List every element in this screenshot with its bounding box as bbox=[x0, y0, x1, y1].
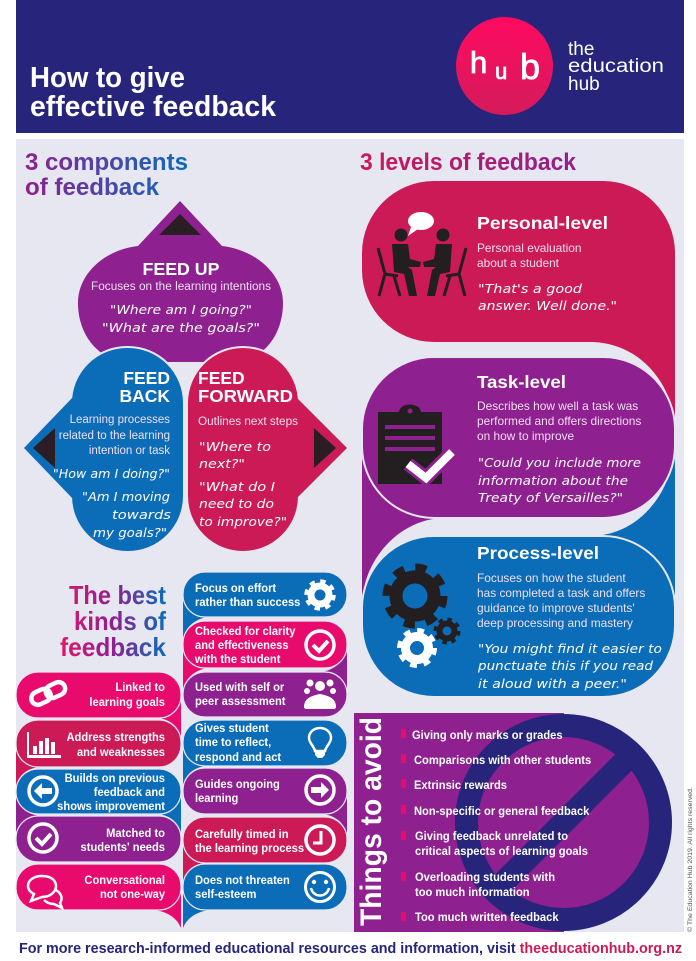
feed back text: my goals?" bbox=[93, 525, 167, 540]
bubble: guides ongoing learning: Guides ongoing bbox=[195, 779, 280, 791]
bubble: carefully timed: the learning process bbox=[195, 843, 304, 855]
process-level text: deep processing and mastery bbox=[477, 616, 633, 630]
task-level text: on how to improve bbox=[477, 429, 575, 443]
feed back text: Learning processes bbox=[70, 414, 170, 426]
feed forward text: FORWARD bbox=[198, 386, 293, 406]
bubble: address strengths and weaknesses: Address strengths bbox=[66, 732, 165, 744]
panel: things to avoid bbox=[354, 713, 660, 932]
heading: the best kinds of feedback: kinds of bbox=[74, 606, 166, 636]
process-level text: it aloud with a peer." bbox=[478, 676, 627, 691]
icon: gear bbox=[306, 582, 334, 608]
bubble: carefully timed: Carefully timed in bbox=[195, 829, 289, 841]
feed back text: intention or task bbox=[89, 445, 170, 457]
heading: the best kinds of feedback: feedback bbox=[60, 632, 166, 662]
bubble: focus on effort: Focus on effort bbox=[195, 583, 276, 595]
task-level text: information about the bbox=[478, 473, 628, 488]
list of things to avoid: Non-specific or general feedback bbox=[414, 806, 590, 818]
bubble: gives student time: Gives student bbox=[195, 723, 269, 735]
heading: the best kinds of feedback: The best bbox=[69, 580, 166, 610]
logo: u bbox=[495, 59, 507, 84]
panel: process-level bbox=[362, 536, 675, 697]
vertical heading: Things to avoid bbox=[355, 717, 388, 926]
icon: forward arrow bbox=[306, 776, 334, 804]
feed back text: FEED bbox=[123, 368, 170, 388]
bubble: does not threaten self-esteem bbox=[183, 864, 347, 910]
process-level text: guidance to improve students' bbox=[477, 601, 635, 615]
panel: personal-level bbox=[362, 181, 675, 342]
bubble: conversational not one-way: not one-way bbox=[100, 889, 166, 901]
icon: clock bbox=[306, 826, 334, 854]
bubble: linked to learning goals bbox=[16, 672, 181, 718]
feed forward text: FEED bbox=[198, 368, 245, 388]
list of things to avoid: Comparisons with other students bbox=[414, 755, 591, 767]
bubble: focus on effort: rather than success bbox=[195, 597, 300, 609]
tails of the best-kinds bubbles bbox=[16, 595, 347, 928]
bubble: address strengths and weaknesses: and weaknesses bbox=[77, 747, 165, 759]
title bbox=[30, 62, 277, 123]
process-level text: has completed a task and offers bbox=[477, 586, 645, 600]
feed forward text: need to do bbox=[199, 496, 274, 511]
feed back text: "How am I doing?" bbox=[53, 466, 170, 481]
bubble: address strengths and weaknesses bbox=[16, 720, 181, 767]
feed forward text: "Where to bbox=[199, 439, 271, 454]
bubble: guides ongoing learning bbox=[183, 768, 347, 814]
feed forward text: Outlines next steps bbox=[198, 416, 298, 428]
bubble: conversational not one-way: Conversational bbox=[84, 875, 165, 887]
icon: group of people bbox=[304, 680, 336, 709]
bubble: checked for clarity: with the student bbox=[194, 654, 281, 666]
bubble: gives student time: time to reflect, bbox=[195, 737, 271, 749]
personal-level text: answer. Well done." bbox=[478, 298, 617, 313]
heading: 3 components of feedback: 3 components bbox=[25, 149, 188, 176]
personal-level text: about a student bbox=[477, 256, 560, 270]
heading: 3 components of feedback bbox=[25, 149, 188, 201]
list of things to avoid: Too much written feedback bbox=[415, 912, 559, 924]
bubble: used with self or peer assessment bbox=[183, 672, 347, 717]
footer: For more research-informed educational resources and information, visit theeducationhub.org.nz bbox=[19, 941, 682, 957]
process-level text: punctuate this if you read bbox=[477, 658, 653, 673]
icon: back arrow bbox=[29, 777, 57, 805]
icon: clipboard with check bbox=[378, 404, 452, 484]
logo: b bbox=[520, 46, 540, 87]
process-level text: "You might find it easier to bbox=[478, 641, 662, 656]
copyright note: © The Education Hub 2019. All rights reserved. bbox=[687, 787, 694, 932]
header banner bbox=[16, 0, 684, 133]
bubble: matched to students' needs: students' needs bbox=[81, 842, 165, 854]
task-level text: Describes how well a task was bbox=[477, 399, 638, 413]
bubble: guides ongoing learning: learning bbox=[195, 793, 238, 805]
logo: education bbox=[568, 56, 664, 77]
feed back text: towards bbox=[112, 507, 172, 522]
list of things to avoid: Giving feedback unrelated to bbox=[415, 831, 568, 843]
bubble: used with self or peer assessment: Used with self or bbox=[195, 682, 285, 694]
bubble: builds on previous feedback bbox=[16, 769, 181, 814]
heading: 3 levels of feedback: 3 levels of feedback bbox=[360, 149, 577, 176]
logo: hub bbox=[568, 74, 600, 95]
icon: gears bbox=[387, 568, 458, 665]
task-level text: Treaty of Versailles?" bbox=[478, 490, 623, 505]
bubble: does not threaten self-esteem: self-esteem bbox=[195, 889, 256, 901]
feed up text bbox=[91, 259, 271, 335]
icon: right triangle bbox=[314, 428, 336, 468]
icon: check circle bbox=[306, 631, 334, 659]
process-level text: Focuses on how the student bbox=[477, 571, 626, 585]
bubble: focus on effort bbox=[183, 572, 347, 617]
logo bbox=[456, 17, 664, 115]
icon: left triangle bbox=[33, 428, 55, 468]
feed up text: Focuses on the learning intentions bbox=[91, 281, 271, 293]
list of things to avoid: too much information bbox=[415, 887, 530, 899]
panel: feed up bbox=[78, 201, 283, 362]
personal-level text: Personal-level bbox=[477, 213, 608, 233]
bubble: does not threaten self-esteem: Does not threaten bbox=[195, 875, 290, 887]
bubble: checked for clarity: and effectiveness bbox=[195, 640, 289, 652]
personal-level text: Personal evaluation bbox=[477, 241, 581, 255]
bubble: checked for clarity: Checked for clarity bbox=[195, 626, 296, 638]
icon: up triangle bbox=[159, 214, 201, 235]
feed back text: "Am I moving bbox=[82, 489, 170, 504]
bubble: builds on previous feedback: Builds on previous bbox=[65, 773, 165, 785]
feed up text: "What are the goals?" bbox=[102, 320, 260, 335]
bubble: matched to students' needs: Matched to bbox=[106, 828, 165, 840]
title: How to give bbox=[30, 62, 185, 94]
list of things to avoid: Extrinsic rewards bbox=[414, 780, 507, 792]
bubble: linked to learning goals: learning goals bbox=[89, 697, 165, 709]
feed up text: "Where am I going?" bbox=[110, 302, 252, 317]
icon: speech bubbles bbox=[28, 876, 62, 908]
logo: the bbox=[568, 39, 594, 60]
feed up text: FEED UP bbox=[142, 259, 220, 279]
icon: prohibition sign bbox=[466, 726, 660, 920]
bubble: gives student time: respond and act bbox=[195, 752, 281, 764]
list of things to avoid: Overloading students with bbox=[415, 872, 555, 884]
process-level text: Process-level bbox=[477, 543, 599, 563]
icon: light bulb bbox=[309, 728, 331, 758]
icon: check circle bbox=[29, 824, 57, 852]
bubble: matched to students' needs bbox=[16, 816, 181, 862]
task-level text: performed and offers directions bbox=[477, 414, 641, 428]
personal-level text: "That's a good bbox=[478, 281, 582, 296]
bubble: gives student time bbox=[183, 720, 347, 766]
heading: the best kinds of feedback bbox=[60, 580, 166, 662]
bubble: conversational not one-way bbox=[16, 864, 181, 910]
bubble: carefully timed bbox=[183, 817, 347, 863]
list of things to avoid: critical aspects of learning goals bbox=[415, 846, 588, 858]
feed back text: BACK bbox=[119, 386, 170, 406]
icon: two people talking bbox=[378, 212, 466, 296]
list of things to avoid bbox=[412, 730, 591, 924]
bubble: builds on previous feedback: feedback and bbox=[94, 787, 165, 799]
logo: h bbox=[470, 45, 487, 80]
feed back text: related to the learning bbox=[59, 430, 170, 442]
feed forward text: to improve?" bbox=[199, 514, 287, 529]
panel: feed forward bbox=[187, 347, 347, 552]
task-level text: "Could you include more bbox=[478, 455, 641, 470]
process-level text bbox=[477, 543, 662, 691]
icon: chain link bbox=[29, 680, 67, 707]
panel: task-level bbox=[362, 357, 675, 518]
list of things to avoid: Giving only marks or grades bbox=[412, 730, 563, 742]
feed forward text: "What do I bbox=[199, 479, 275, 494]
icon: smiley bbox=[306, 872, 334, 902]
bubble: checked for clarity bbox=[183, 621, 347, 668]
heading: 3 components of feedback: of feedback bbox=[25, 174, 160, 201]
title: effective feedback bbox=[30, 91, 277, 123]
icon: bar chart bbox=[27, 732, 61, 758]
bubble: linked to learning goals: Linked to bbox=[115, 682, 165, 694]
feed forward text: next?" bbox=[199, 456, 245, 471]
feed forward text bbox=[198, 368, 298, 529]
tails of the levels panels bbox=[362, 250, 675, 610]
panel: feed back bbox=[24, 347, 184, 552]
bubble: used with self or peer assessment: peer assessment bbox=[195, 696, 286, 708]
task-level text bbox=[477, 372, 641, 505]
feed back text bbox=[53, 368, 172, 540]
bubble: builds on previous feedback: shows improvement bbox=[57, 801, 165, 813]
task-level text: Task-level bbox=[477, 372, 566, 392]
personal-level text bbox=[477, 213, 617, 313]
bullet markers bbox=[401, 729, 406, 921]
